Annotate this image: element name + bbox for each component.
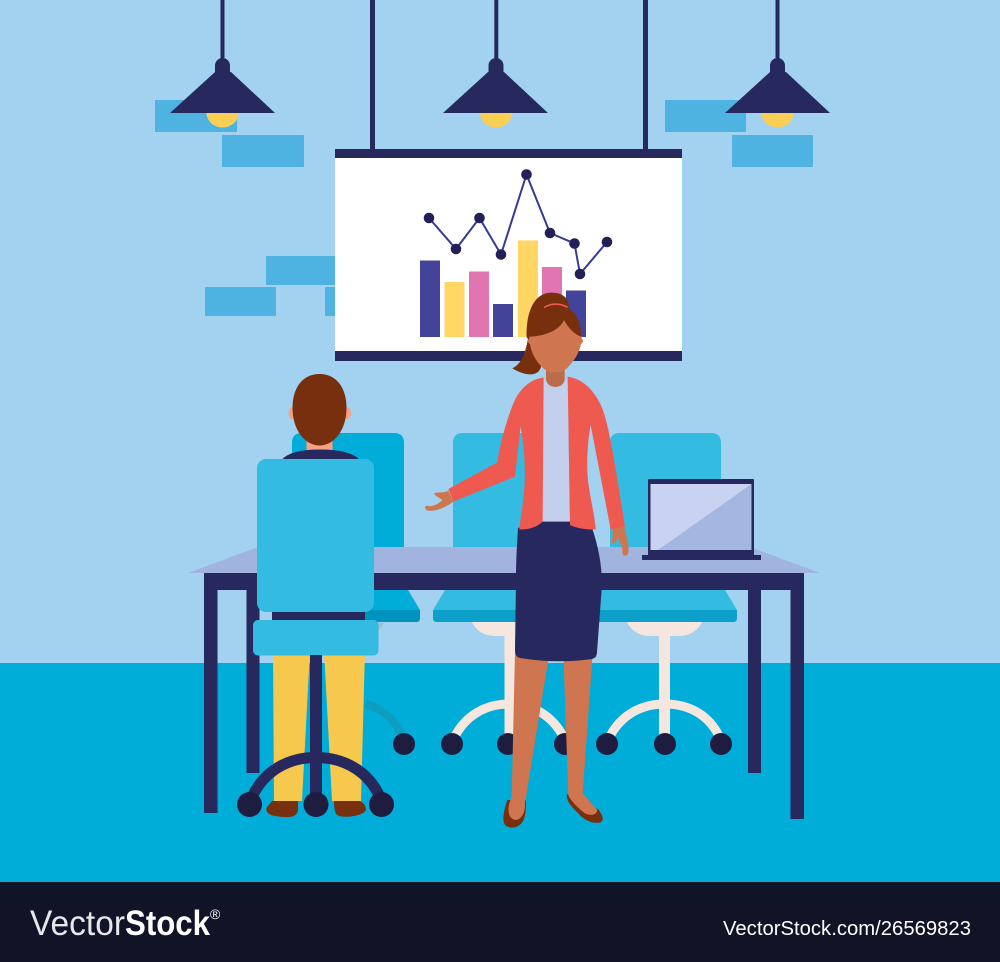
presentation board xyxy=(335,0,682,361)
woman: headband xyxy=(544,304,568,308)
wall bricks xyxy=(155,100,813,316)
image id text: VectorStock.com/26569823 xyxy=(723,918,971,940)
laptop xyxy=(642,479,761,560)
man: left shoe xyxy=(266,801,298,817)
man: collar xyxy=(282,450,360,460)
woman: shirt xyxy=(542,377,570,522)
far chair base centre xyxy=(441,622,576,755)
icon: ceiling lamp left xyxy=(170,0,275,128)
woman: upper body xyxy=(425,293,629,556)
man: right shoe xyxy=(334,801,366,817)
chair seat xyxy=(253,620,378,656)
woman: hair xyxy=(527,293,581,339)
woman: right hand xyxy=(612,526,629,556)
icon: ceiling lamp right xyxy=(725,0,830,128)
bar chart xyxy=(420,240,586,337)
wall background xyxy=(0,0,1000,663)
chair stem and base xyxy=(237,655,394,817)
footer bar xyxy=(0,882,1000,962)
man: neck and ears xyxy=(288,407,351,452)
woman: legs and shoes xyxy=(503,653,603,828)
man: left trouser leg xyxy=(273,650,310,801)
woman: jacket right xyxy=(568,377,625,529)
woman: face xyxy=(529,320,582,373)
logo: VectorStock: Stock xyxy=(125,904,210,943)
standing woman xyxy=(425,293,629,828)
far chair base right xyxy=(596,622,732,755)
table xyxy=(188,547,820,819)
far chair backs xyxy=(292,433,721,548)
logo: VectorStock: Vector xyxy=(30,904,125,943)
floor xyxy=(0,663,1000,882)
woman: left hand xyxy=(425,491,453,511)
seated man xyxy=(266,374,366,817)
far chair base left xyxy=(365,623,415,755)
icon: ceiling lamp centre xyxy=(443,0,548,128)
logo: VectorStock xyxy=(30,904,221,943)
woman: skirt xyxy=(515,521,602,661)
woman: neck xyxy=(546,363,565,387)
woman: jacket left xyxy=(448,377,544,529)
man: right trouser leg xyxy=(324,650,365,801)
man: hair xyxy=(292,374,346,446)
woman: ponytail xyxy=(512,337,541,374)
woman: ears xyxy=(528,338,583,347)
front chair xyxy=(237,459,394,817)
logo: VectorStock: ® xyxy=(210,906,221,922)
chair backrest xyxy=(257,459,374,612)
line chart xyxy=(424,169,612,279)
far chair seats xyxy=(300,590,737,622)
